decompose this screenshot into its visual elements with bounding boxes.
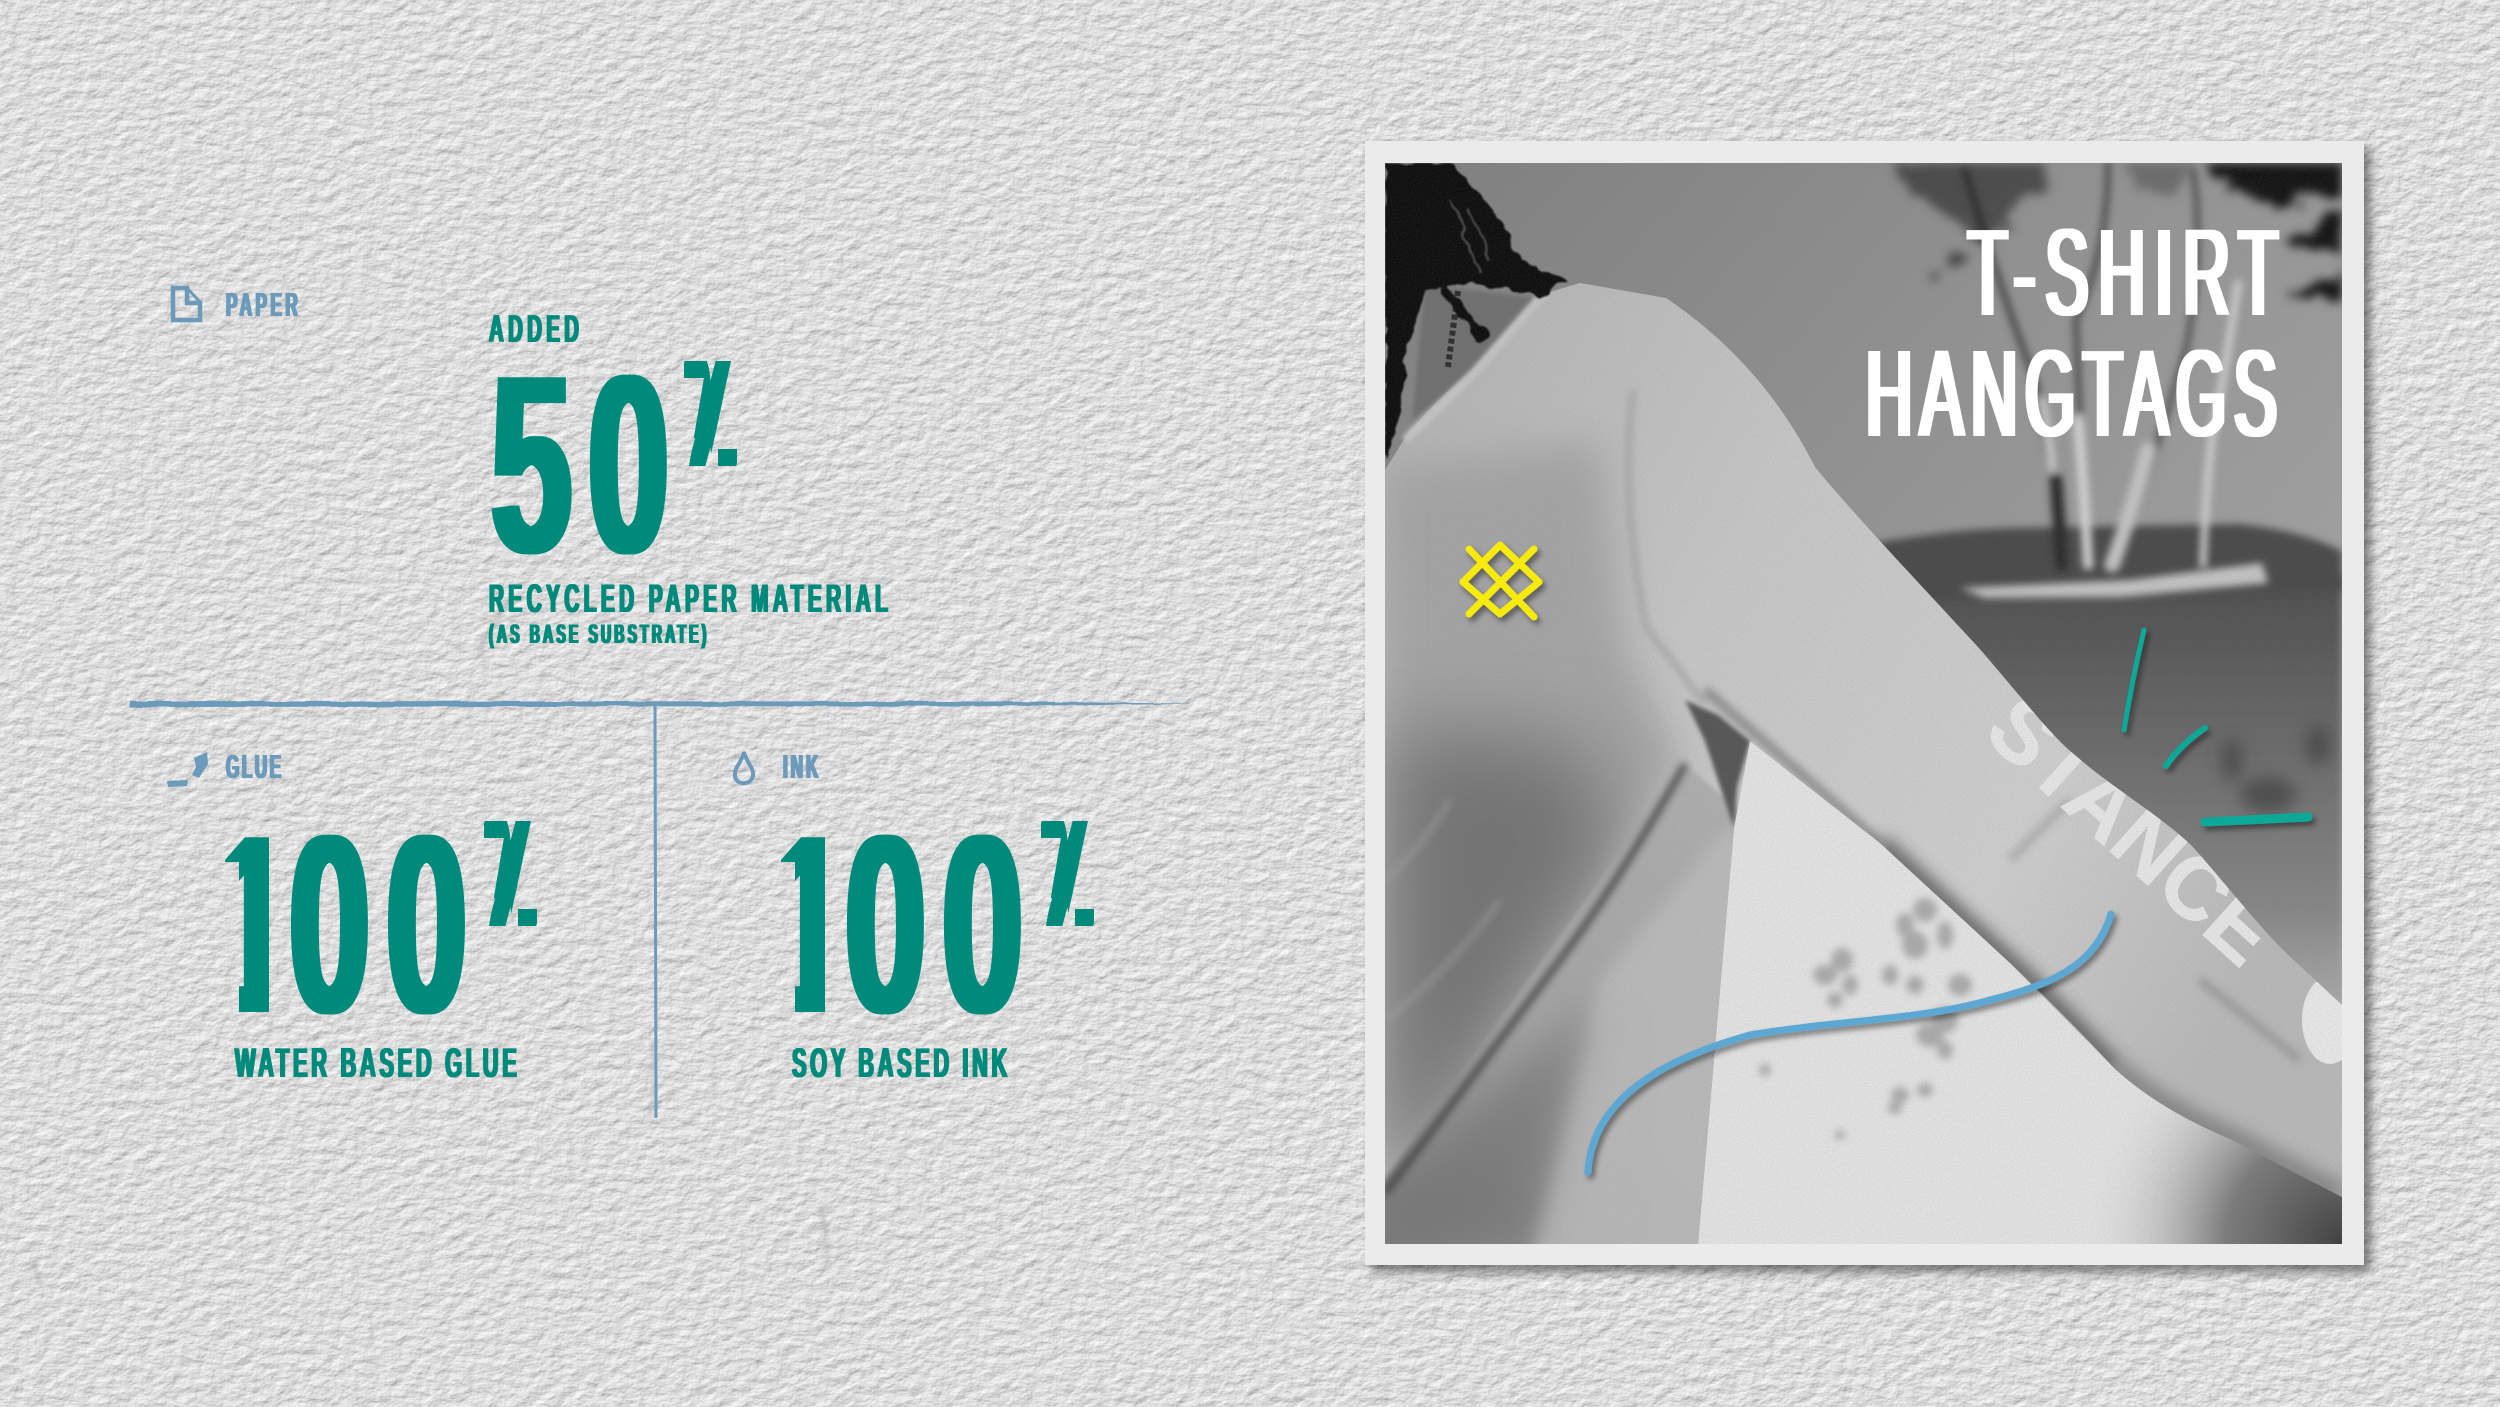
panel: glue stat [167, 748, 537, 1087]
photo: ground and hill [1878, 520, 2342, 1056]
photo: shirt [1370, 270, 2342, 1260]
text: added: ADDED [489, 307, 579, 351]
title [1866, 203, 2278, 462]
number: 100 ink: 100 [770, 782, 1023, 1066]
text: % [1041, 792, 1094, 955]
photo: sleeve print [1969, 676, 2358, 1064]
photo: foliage [1880, 155, 2350, 305]
number: 50: 50 [491, 322, 669, 606]
text: as base substrate: (AS BASE SUBSTRATE) [489, 619, 706, 649]
divider: vertical rule [655, 704, 656, 1118]
panel: ink stat [735, 748, 1094, 1087]
photo: neck and collar [1405, 285, 1545, 440]
title: T-SHIRT [1968, 203, 2278, 341]
text: recycled paper material: RECYCLED PAPER MATERIAL [489, 576, 888, 621]
panel: photo frame [1365, 141, 2364, 1265]
photo: sand [1698, 741, 2342, 1244]
photo: tree trunks [1965, 163, 2238, 565]
photo: person in long sleeve shirt [1370, 155, 2358, 1260]
panel: paper stat [173, 286, 888, 649]
icon: glue tube [167, 752, 208, 787]
divider: horizontal rule [130, 701, 1190, 707]
icon: paper sheet [173, 288, 200, 320]
label: paper: PAPER [226, 286, 298, 324]
title: HANGTAGS [1866, 324, 2277, 462]
photo: hair [1385, 163, 1568, 460]
icon: ink drop [735, 752, 753, 783]
label: ink: INK [783, 748, 818, 786]
accent: blue curve [1588, 914, 2111, 1172]
accent: teal dashes [2124, 630, 2308, 822]
photo: sleeve print: STANCE [1969, 676, 2295, 984]
icon: yellow lattice mark [1463, 545, 1539, 617]
number: 100 glue: 100 [214, 782, 467, 1066]
text: water based glue: WATER BASED GLUE [235, 1041, 517, 1087]
label: glue: GLUE [226, 748, 281, 786]
text: % [484, 792, 537, 955]
panel: paper stat: % [684, 332, 737, 495]
text: soy based ink: SOY BASED INK [792, 1041, 1007, 1087]
photo: grain [1385, 163, 2342, 1244]
